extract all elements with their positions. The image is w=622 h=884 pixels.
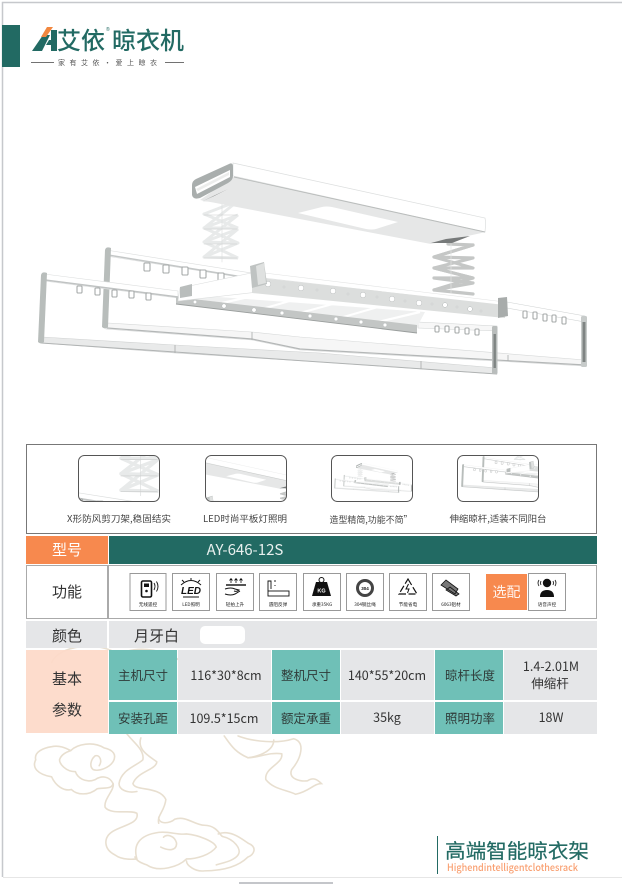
icon: voice control — [528, 574, 566, 610]
optional tag — [486, 574, 527, 610]
parameters table — [26, 650, 597, 734]
parameters table: 伸缩杆 — [531, 673, 569, 692]
model row: AY-646-12S — [207, 539, 283, 560]
parameters table: 35kg — [373, 707, 401, 726]
icon: energy saving: 节能省电 — [399, 601, 418, 608]
icon: 304 steel cable: 304 — [361, 586, 369, 591]
parameters table: 140*55*20cm — [348, 665, 426, 684]
icon: 304 steel cable: 304钢丝绳 — [354, 601, 376, 608]
icon: LED light — [172, 574, 210, 610]
right scissor arm — [434, 244, 473, 294]
icon: 35KG load — [304, 574, 340, 610]
icon: easy lift: 轻拍上升 — [226, 601, 245, 608]
ceiling housing — [192, 163, 486, 244]
feature: scissor arm: X形防风剪刀架,稳固结实 — [67, 512, 171, 525]
icon: wireless remote — [130, 574, 166, 610]
feature: LED panel: LED时尚平板灯照明 — [203, 512, 287, 525]
parameters table: 109.5*15cm — [190, 708, 258, 727]
parameters label: 基本 — [52, 668, 82, 689]
front extension frame — [38, 272, 508, 374]
footer title: 高端智能晾衣架 — [445, 835, 589, 864]
parameters table: 主机尺寸 — [118, 665, 168, 684]
parameters table: 额定承重 — [281, 708, 331, 727]
clothes hooks — [77, 263, 566, 335]
icon: voice control: 语音声控 — [538, 601, 557, 608]
rear extension frame — [102, 247, 587, 367]
function row: 功能 — [52, 581, 82, 602]
icon: 35KG load: KG — [317, 588, 326, 594]
logo mark — [32, 27, 57, 51]
parameters label — [26, 650, 108, 733]
logo block: ® — [106, 26, 110, 33]
footer title: Highendintelligentclothesrack — [447, 859, 578, 874]
brand name: 艾依 — [57, 21, 105, 56]
model row — [26, 536, 597, 564]
left scissor arm — [204, 200, 238, 262]
feature: design — [330, 456, 412, 526]
feature: telescopic rods: 伸缩晾杆,适装不同阳台 — [450, 512, 546, 525]
parameters table: 116*30*8cm — [190, 665, 262, 684]
rack end connectors — [250, 262, 267, 288]
icon: LED light: LED照明 — [182, 602, 200, 608]
parameters table: 安装孔距 — [118, 708, 168, 727]
icon: obstacle rebound — [260, 574, 296, 610]
icon: 6063 aluminium — [432, 574, 470, 610]
colour row: 月牙白 — [134, 625, 179, 646]
decorative clouds — [35, 646, 321, 871]
icon: wireless remote: 无线遥控 — [139, 601, 158, 608]
icon: 6063 aluminium: 6063铝材 — [441, 601, 461, 608]
feature: telescopic rods — [450, 455, 546, 524]
LED panel light — [298, 206, 398, 230]
feature: scissor arm — [67, 455, 170, 524]
central drying rack — [176, 262, 508, 333]
icon: easy lift — [216, 574, 254, 610]
parameters table: 18W — [539, 707, 563, 726]
colour row: 颜色 — [52, 625, 82, 646]
parameters table: 照明功率 — [445, 708, 495, 727]
model row: 型号 — [52, 539, 82, 560]
optional tag: 选配 — [492, 582, 520, 602]
parameters table: 晾杆长度 — [445, 665, 495, 684]
product image: electric drying rack — [38, 163, 587, 374]
parameters table: 1.4-2.01M — [523, 656, 579, 675]
feature: design: 造型精简,功能不简” — [330, 513, 412, 526]
icon: 304 steel cable — [346, 574, 384, 610]
feature panel — [26, 444, 597, 534]
logo block — [2, 21, 184, 68]
icon: 35KG load: 承重35KG — [312, 601, 332, 608]
icon: obstacle rebound: 遇阻反弹 — [269, 601, 288, 608]
colour swatch — [200, 626, 245, 644]
parameters table: 整机尺寸 — [281, 665, 331, 684]
parameters label: 参数 — [52, 699, 82, 720]
tagline: 家有艾依·爱上晾衣 — [58, 58, 157, 68]
logo accent bar — [2, 25, 20, 67]
feature: LED panel — [204, 455, 287, 523]
colour row — [26, 621, 597, 648]
footer title — [438, 835, 589, 874]
function row — [26, 566, 596, 618]
icon: LED light: LED — [181, 586, 201, 597]
logo block: 晾衣机 — [112, 21, 184, 56]
icon: energy saving — [390, 574, 426, 610]
